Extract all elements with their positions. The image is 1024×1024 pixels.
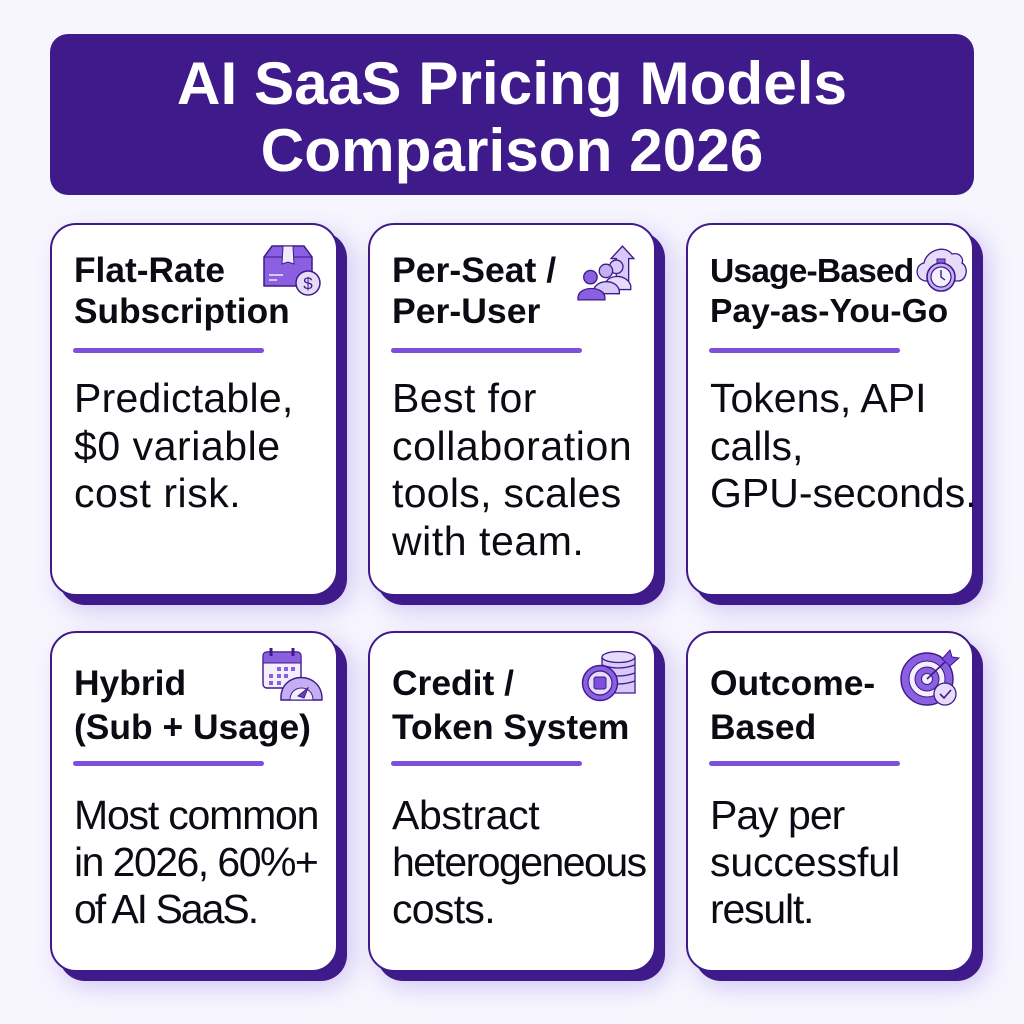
heading: credit token: Credit / [392,662,514,702]
description: Most common [74,792,318,838]
title banner: Comparison 2026 [261,116,763,184]
icon: calendar with gauge [262,648,323,701]
divider [709,348,900,353]
icon: coin and database [582,650,636,702]
heading: credit token [392,662,629,746]
description: Abstract [392,792,539,838]
heading: usage-based [710,253,948,330]
icon: users with up arrow [577,245,636,300]
description [74,375,294,516]
description: of AI SaaS. [74,886,257,932]
divider [391,761,582,766]
heading: flat-rate subscription: Flat-Rate [74,251,225,290]
description: with team. [392,518,584,564]
description: collaboration [392,422,632,468]
icon: box with dollar coin [263,245,321,296]
description: Predictable, [74,375,294,421]
heading: outcome-based: Outcome- [710,662,875,702]
description [74,792,318,932]
description [710,792,900,932]
heading: per-seat: Per-User [392,291,540,331]
panel: per-seat [368,223,656,596]
panel: credit token [368,631,656,972]
divider [73,348,264,353]
description: successful [710,839,900,885]
heading: hybrid: Hybrid [74,662,186,702]
description [392,792,646,932]
description: GPU-seconds. [710,470,977,516]
divider [73,761,264,766]
description: $0 variable [74,422,281,468]
heading: flat-rate subscription: Subscription [74,292,290,331]
description: cost risk. [74,470,241,516]
description: in 2026, 60%+ [74,839,317,885]
description: Best for [392,375,537,421]
panel: flat-rate subscription [50,223,338,596]
title banner: AI SaaS Pricing Models [177,49,847,117]
heading: per-seat: Per-Seat / [392,250,556,290]
panel: outcome-based [686,631,974,972]
description: Pay per [710,792,844,838]
icon: box with dollar coin: $ [303,274,313,293]
panel: hybrid [50,631,338,972]
heading: outcome-based: Based [710,706,816,746]
description: tools, scales [392,470,622,516]
icon: target with check [900,649,960,706]
heading: flat-rate subscription [74,251,290,331]
heading: usage-based: Usage-Based [710,253,913,290]
description: result. [710,886,813,932]
heading: hybrid [74,662,311,746]
description: costs. [392,886,495,932]
divider [709,761,900,766]
panel: usage-based [686,223,974,596]
description [710,375,977,516]
heading: hybrid: (Sub + Usage) [74,706,311,746]
divider [391,348,582,353]
description: heterogeneous [392,839,646,885]
description: calls, [710,422,803,468]
heading: outcome-based [710,662,875,746]
description [392,375,632,564]
title banner [50,34,974,195]
heading: credit token: Token System [392,706,629,746]
heading: per-seat [392,250,556,331]
icon: cloud with stopwatch [916,248,967,292]
description: Tokens, API [710,375,927,421]
heading: usage-based: Pay-as-You-Go [710,292,948,330]
